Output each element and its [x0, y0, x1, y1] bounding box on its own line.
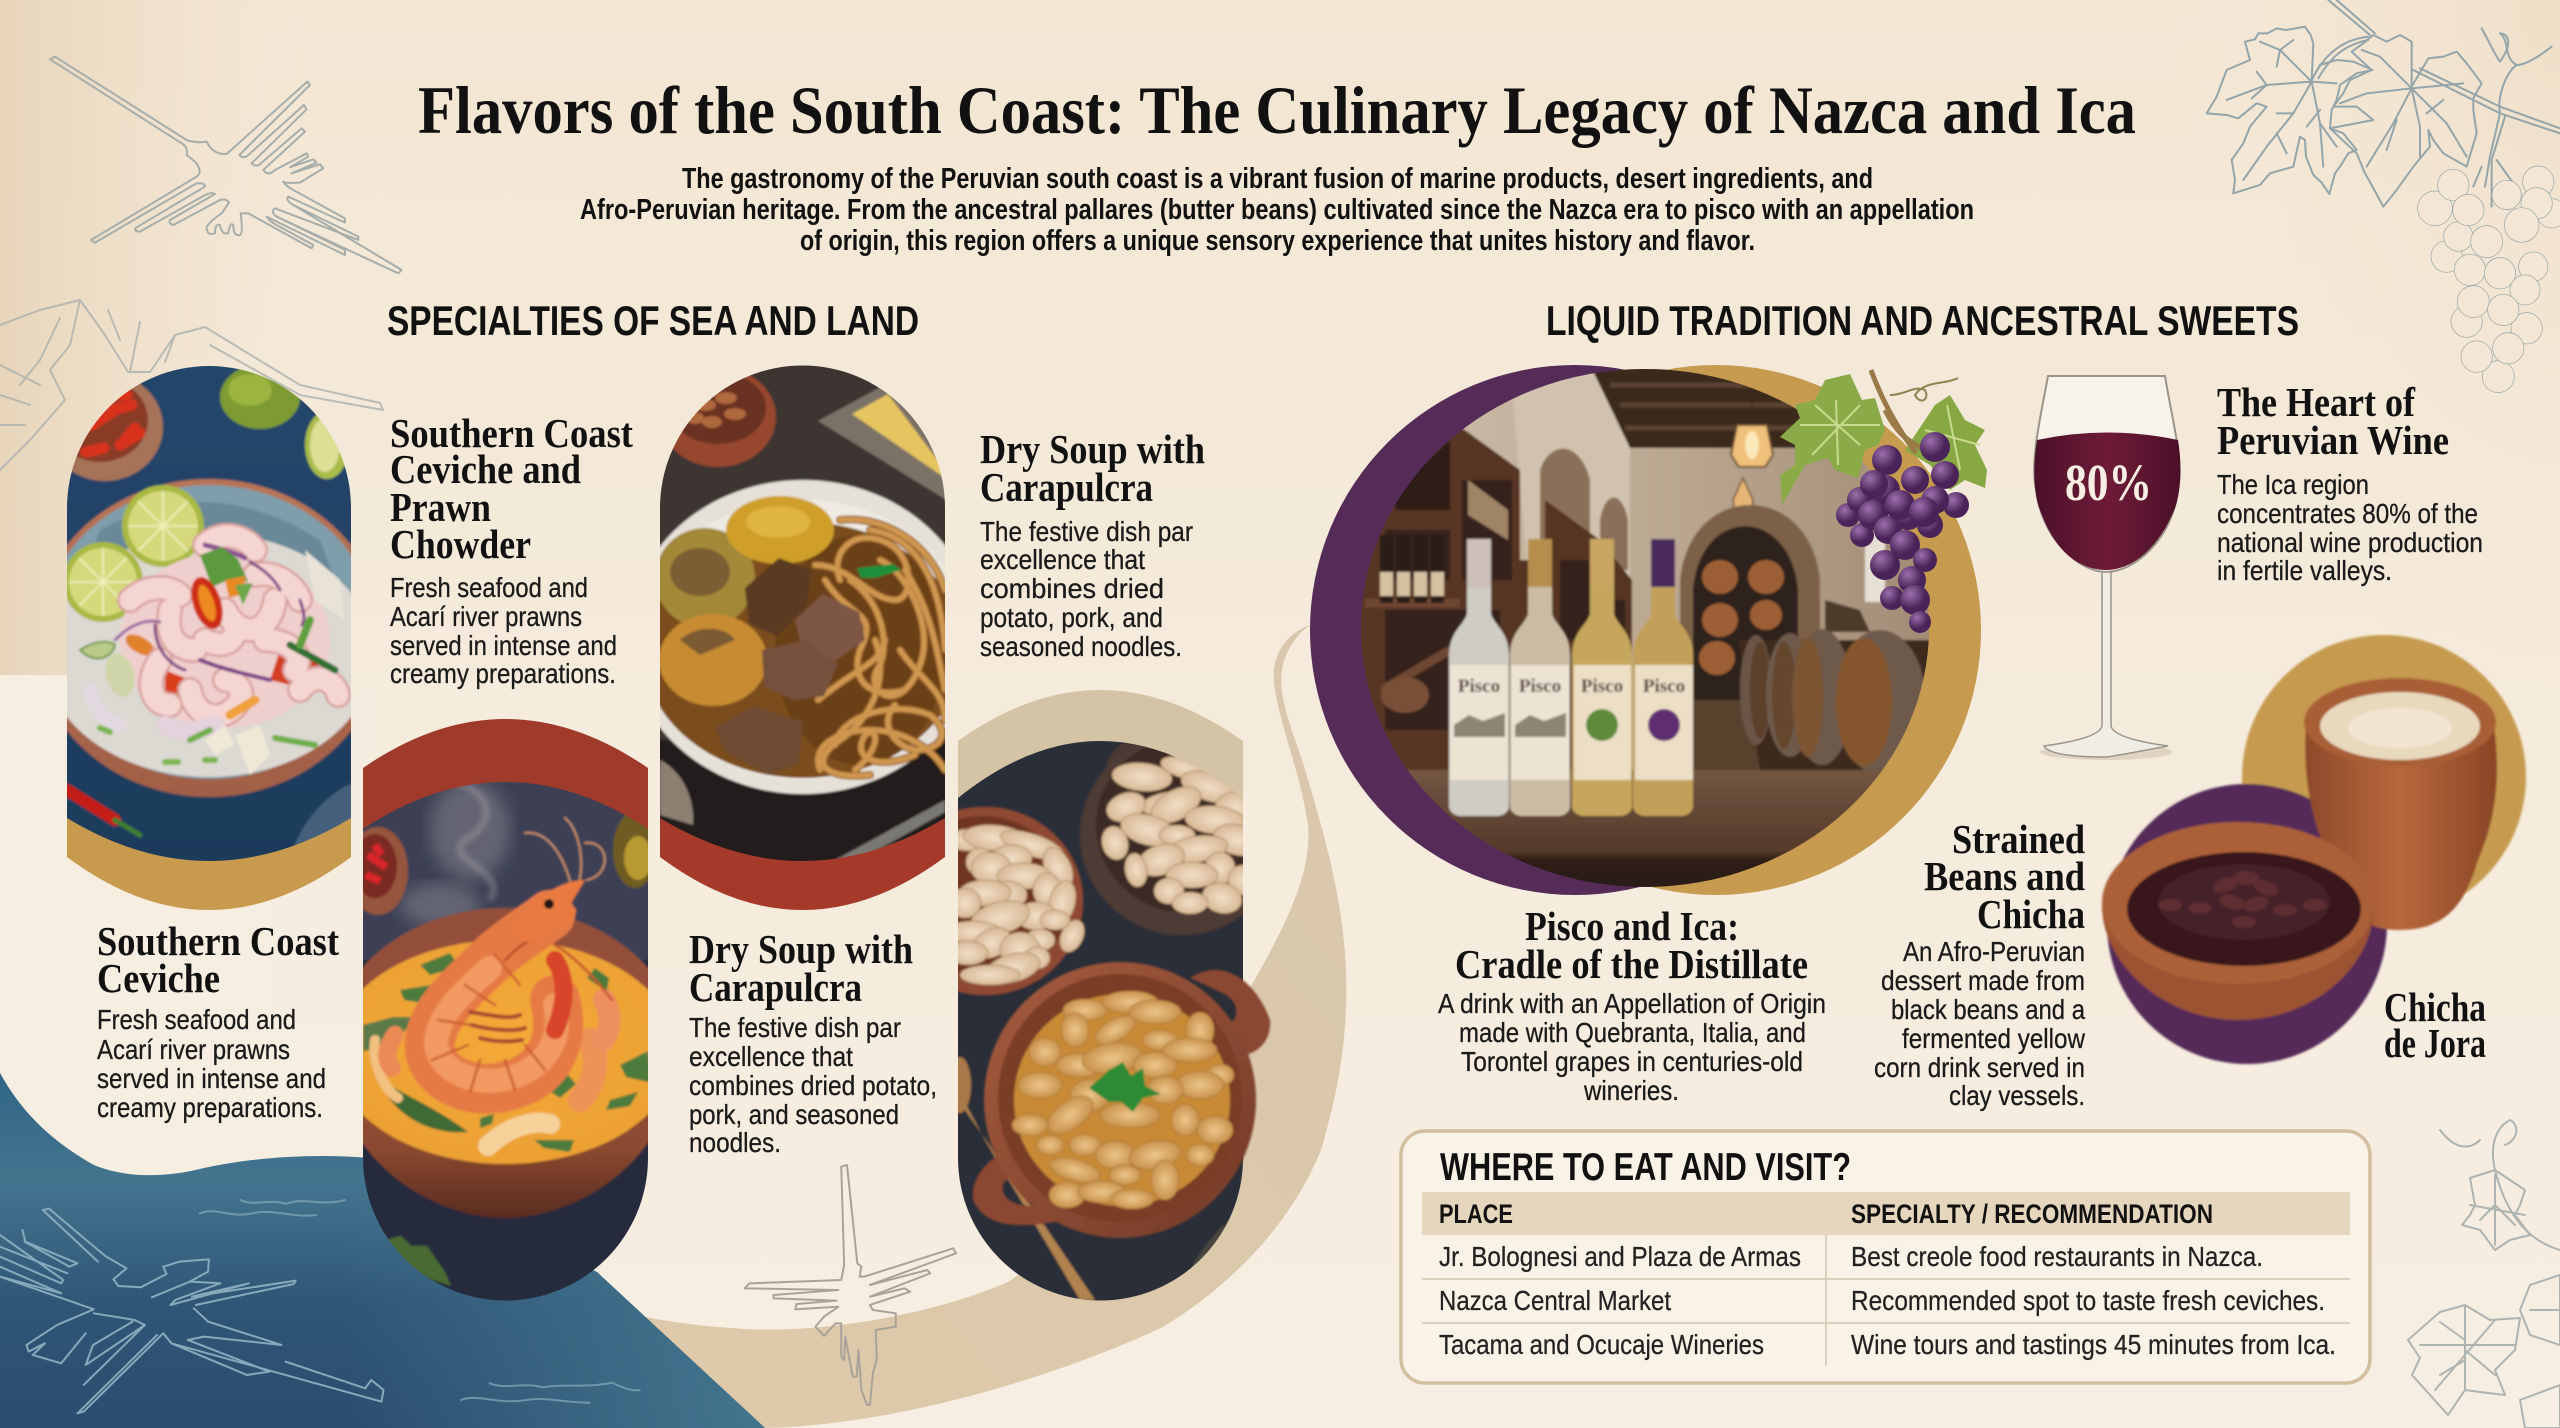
dish text: Strained Beans and Chicha: fermented yellow	[1902, 1023, 2086, 1054]
table row: Tacama and Ocucaje: Wine tours and tastings 45 minutes from Ica.	[1851, 1329, 2336, 1360]
dish text: Strained Beans and Chicha: An Afro-Peruvian	[1903, 936, 2085, 967]
blue sea wave	[0, 1073, 765, 1428]
dish text: Dry Soup with Carapulcra, lower: Carapulcra	[689, 964, 862, 1010]
dish text: Pisco and Ica: Torontel grapes in centuries-old	[1461, 1046, 1803, 1077]
illustration: chicha cup and strained beans bowl	[2102, 635, 2526, 1064]
dish card: dry soup photo pill	[660, 366, 945, 910]
dish text: Dry Soup with Carapulcra, lower: pork, and seasoned	[689, 1099, 899, 1130]
dish card: prawn chowder photo pill	[363, 719, 648, 1300]
flowing tan ribbon	[640, 624, 1346, 1428]
dish text: Southern Coast Ceviche and Prawn Chowder: Chowder	[390, 521, 531, 567]
dish text: Pisco and Ica: made with Quebranta, Italia, and	[1459, 1017, 1806, 1048]
dish text: Dry Soup with Carapulcra, lower: noodles.	[689, 1127, 781, 1158]
dish text: Strained Beans and Chicha: clay vessels.	[1949, 1080, 2085, 1111]
dish text: Southern Coast Ceviche: served in intense and	[97, 1063, 326, 1094]
dish text: The Heart of Peruvian Wine: Peruvian Wine	[2217, 417, 2449, 463]
dish text: Pisco and Ica: wineries.	[1583, 1075, 1679, 1106]
subtitle text block: The gastronomy of the Peruvian south coast is a vibrant fusion of marine products, desert ingredients, and	[682, 163, 1873, 195]
dish text: Pisco and Ica: Pisco and Ica:	[1525, 903, 1739, 949]
table row: Tacama and Ocucaje: Tacama and Ocucaje Wineries	[1439, 1329, 1764, 1360]
dish text: Strained Beans and Chicha: black beans and a	[1891, 994, 2085, 1025]
dish text: Strained Beans and Chicha: dessert made from	[1881, 965, 2085, 996]
dish text: Strained Beans and Chicha: corn drink served in	[1874, 1052, 2085, 1083]
dish text: Pisco and Ica: Cradle of the Distillate	[1455, 941, 1808, 987]
dish text: Southern Coast Ceviche and Prawn Chowder: Southern Coast	[390, 410, 633, 456]
label: Chicha de Jora: de Jora	[2384, 1020, 2486, 1066]
dish text: Dry Soup with Carapulcra, lower: excellence that	[689, 1041, 853, 1072]
hanging lanterns	[1729, 402, 1775, 508]
dish text: Southern Coast Ceviche: Ceviche	[97, 955, 220, 1001]
dish text: Dry Soup with Carapulcra, upper	[980, 426, 1205, 662]
table header row: SPECIALTY / RECOMMENDATION	[1851, 1199, 2213, 1229]
dish text: Dry Soup with Carapulcra, upper: The festive dish par	[980, 516, 1193, 547]
dish text: Southern Coast Ceviche and Prawn Chowder: Prawn	[390, 484, 491, 530]
dish text: The Heart of Peruvian Wine: in fertile valleys.	[2217, 555, 2392, 586]
wine percentage: 80%	[2065, 455, 2152, 512]
dish text: The Heart of Peruvian Wine	[2217, 379, 2483, 586]
pisco bottles: Pisco	[1581, 676, 1623, 697]
label: Chicha de Jora	[2384, 984, 2486, 1066]
dish text: The Heart of Peruvian Wine: The Ica region	[2217, 469, 2369, 500]
dish text: Strained Beans and Chicha	[1874, 816, 2086, 1111]
dish card: ceviche photo pill	[67, 366, 351, 910]
dish text: Strained Beans and Chicha: Chicha	[1977, 891, 2085, 937]
dish text: Dry Soup with Carapulcra, upper: Carapulcra	[980, 464, 1153, 510]
line art: Nazca hummingbird, top left	[50, 57, 402, 273]
label: Chicha de Jora: Chicha	[2384, 984, 2486, 1030]
dish text: Southern Coast Ceviche	[97, 918, 339, 1123]
dish text: Dry Soup with Carapulcra, lower: Dry Soup with	[689, 926, 913, 972]
icon: wine glass with 80%	[2034, 376, 2180, 760]
dish text: Dry Soup with Carapulcra, upper: seasoned noodles.	[980, 631, 1182, 662]
dish text: Southern Coast Ceviche: Acarí river prawns	[97, 1034, 290, 1065]
dish text: Strained Beans and Chicha: Strained	[1952, 816, 2085, 862]
dish text: The Heart of Peruvian Wine: The Heart of	[2217, 379, 2416, 425]
title: Flavors of the South Coast: The Culinary Legacy of Nazca and Ica	[418, 72, 2136, 148]
dish text: The Heart of Peruvian Wine: national wine production	[2217, 527, 2483, 558]
table row: Nazca Central Market	[1439, 1285, 2325, 1316]
table row: Nazca Central Market: Nazca Central Market	[1439, 1285, 1671, 1316]
dish text: Dry Soup with Carapulcra, upper: Dry Soup with	[980, 426, 1205, 472]
dish text: Southern Coast Ceviche and Prawn Chowder	[390, 410, 633, 689]
dish text: Strained Beans and Chicha: Beans and	[1924, 853, 2085, 899]
line art: vine leaves, bottom right	[2408, 1120, 2560, 1428]
pisco bottles: Pisco	[1458, 676, 1500, 697]
dish text: Dry Soup with Carapulcra, lower: combines dried potato,	[689, 1070, 937, 1101]
subtitle text block: of origin, this region offers a unique sensory experience that unites history and flavor.	[800, 225, 1755, 257]
pisco cellar photo with purple and gold crescents	[1310, 365, 1981, 895]
dish text: Southern Coast Ceviche and Prawn Chowder: Acarí river prawns	[390, 601, 582, 632]
dish text: The Heart of Peruvian Wine: concentrates 80% of the	[2217, 498, 2478, 529]
dish text: Dry Soup with Carapulcra, lower	[689, 926, 937, 1158]
line art: mountains and bird, left	[0, 300, 383, 470]
pisco bottles	[1449, 539, 1693, 816]
dish card: butter beans photo pill	[958, 690, 1272, 1300]
dish text: Pisco and Ica: A drink with an Appellation of Origin	[1438, 988, 1826, 1019]
table header row	[1422, 1192, 2350, 1235]
table row: Jr. Bolognesi	[1439, 1241, 2263, 1272]
section heading: liquid tradition: LIQUID TRADITION AND ANCESTRAL SWEETS	[1546, 297, 2299, 344]
line art: vine, leaves and grapes, top right	[2207, 0, 2560, 393]
line art: hummingbird geoglyph	[745, 1165, 956, 1405]
panel: liquid tradition and ancestral sweets	[1310, 297, 2526, 1383]
pisco bottles: Pisco	[1643, 676, 1685, 697]
dish text: Southern Coast Ceviche and Prawn Chowder: Fresh seafood and	[390, 572, 588, 603]
dish text: Southern Coast Ceviche: Southern Coast	[97, 918, 339, 964]
dish text: Dry Soup with Carapulcra, upper: excellence that	[980, 544, 1145, 575]
table header row: PLACE	[1439, 1199, 1513, 1229]
table heading: WHERE TO EAT AND VISIT?	[1440, 1146, 1851, 1189]
subtitle text block	[580, 163, 1974, 257]
dish text: Southern Coast Ceviche and Prawn Chowder: served in intense and	[390, 630, 617, 661]
dish text: Dry Soup with Carapulcra, upper: potato, pork, and	[980, 602, 1163, 633]
icon: grape bunch with leaves	[1780, 370, 1987, 633]
wine cellar shelves	[1355, 428, 1632, 770]
line art: Nazca bird on sea	[0, 1200, 640, 1413]
pisco bottles: Pisco	[1519, 676, 1561, 697]
panel: specialties of sea and land	[34, 297, 1284, 1305]
dish text: Southern Coast Ceviche and Prawn Chowder: Ceviche and	[390, 446, 581, 492]
clay pot with handles	[973, 962, 1270, 1238]
subtitle text block: Afro-Peruvian heritage. From the ancestral pallares (butter beans) cultivated since the Nazca era to pisco with an appellation	[580, 194, 1974, 226]
dish text: Dry Soup with Carapulcra, lower: The festive dish par	[689, 1012, 901, 1043]
table row: Nazca Central Market: Recommended spot to taste fresh ceviches.	[1851, 1285, 2325, 1316]
dish text: Pisco and Ica	[1438, 903, 1826, 1106]
dish text: Southern Coast Ceviche and Prawn Chowder: creamy preparations.	[390, 658, 616, 689]
table row: Jr. Bolognesi: Best creole food restaurants in Nazca.	[1851, 1241, 2263, 1272]
table row: Tacama and Ocucaje	[1439, 1329, 2336, 1360]
section heading: specialties: SPECIALTIES OF SEA AND LAND	[387, 297, 919, 344]
table row: Jr. Bolognesi: Jr. Bolognesi and Plaza de Armas	[1439, 1241, 1801, 1272]
dish text: Dry Soup with Carapulcra, upper: combines dried	[980, 573, 1164, 604]
dish text: Southern Coast Ceviche: creamy preparations.	[97, 1092, 323, 1123]
dish text: Southern Coast Ceviche: Fresh seafood and	[97, 1004, 296, 1035]
table panel: where to eat and visit	[1401, 1131, 2370, 1383]
